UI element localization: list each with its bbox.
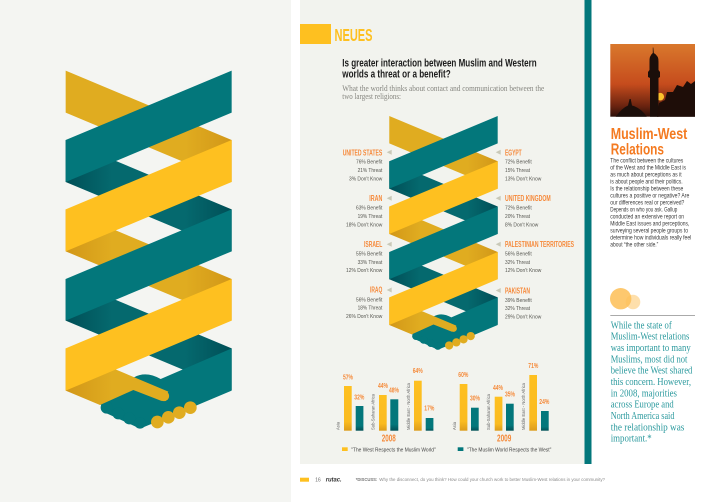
pull quote: the relationship was — [611, 422, 684, 433]
region labels 2008 — [336, 382, 411, 430]
legend: "The Muslim World Respects the West" — [467, 447, 551, 453]
sidebar body text: Is the relationship between these — [610, 186, 684, 193]
region labels 2009 — [452, 382, 526, 430]
data: Iran — [346, 194, 392, 228]
sidebar body text: surveying several people groups to — [610, 228, 688, 235]
footer: *DISCUSS: — [356, 477, 378, 483]
sidebar body text: is about people and their politics. — [610, 179, 683, 186]
panel: left cover page — [0, 0, 291, 502]
front yellow ribbon two — [66, 279, 232, 391]
data: Israel — [346, 240, 392, 274]
data: Egypt — [496, 148, 542, 182]
values 2008 — [343, 366, 435, 413]
data: Israel: 33% Threat — [358, 260, 383, 266]
pull quote — [611, 320, 692, 445]
region labels 2008: Asia — [336, 421, 340, 430]
sidebar body text: The conflict between the cultures — [610, 158, 683, 165]
pull quote: believe the West shared — [611, 366, 692, 377]
data: United States — [343, 148, 392, 182]
data: Palestinian Territories: PALESTINIAN TERRITORIES — [505, 240, 574, 249]
sidebar body text: about “the other side.” — [610, 242, 658, 249]
minaret silhouette — [648, 48, 660, 117]
data: Egypt: EGYPT — [505, 148, 522, 157]
icon: overlapping circles — [610, 288, 640, 309]
values 2009: 71% — [528, 361, 539, 370]
data: Palestinian Territories: 32% Threat — [505, 260, 530, 266]
data: United Kingdom: UNITED KINGDOM — [505, 194, 551, 203]
data: Israel: 12% Don't Know — [346, 268, 383, 274]
data: Israel: 55% Benefit — [356, 251, 383, 257]
teal hand — [101, 348, 232, 429]
data: Iran: 19% Threat — [358, 214, 383, 220]
data: Israel: ISRAEL — [364, 240, 382, 249]
legend — [342, 447, 551, 453]
back teal ribbon upper — [66, 140, 232, 251]
article subheading: two largest religions: — [342, 92, 401, 101]
yellow hand and thumb — [66, 348, 197, 428]
data: Egypt: 15% Threat — [505, 168, 530, 174]
sidebar body text: Middle East issues and perceptions, — [610, 221, 689, 228]
values 2009: 44% — [493, 383, 503, 392]
data: Pakistan: 32% Threat — [505, 306, 530, 312]
section tab — [300, 24, 331, 44]
panel: main article page — [300, 0, 584, 464]
tree silhouette — [657, 81, 695, 117]
pull quote: in 2008, majorities — [611, 388, 677, 399]
footer: Why the disconnect, do you think? How could your church work to better Muslim-West relations in your community? — [379, 477, 605, 483]
values 2008: 17% — [424, 404, 435, 413]
sidebar title: Muslim-West — [611, 126, 688, 143]
bar chart: 2009 — [452, 361, 550, 445]
data: United States: 76% Benefit — [356, 160, 383, 166]
article heading: worlds a threat or a benefit? — [342, 69, 451, 81]
values 2008: 44% — [378, 381, 388, 390]
values 2008: 48% — [389, 386, 399, 395]
legend: "The West Respects the Muslim World" — [351, 447, 436, 453]
year 2008: 2008 — [382, 434, 396, 445]
data: United Kingdom: 72% Benefit — [505, 206, 532, 212]
pull quote: While the state of — [611, 320, 672, 331]
values 2008: 57% — [343, 372, 353, 381]
sidebar body text: as much about perceptions as it — [610, 172, 682, 179]
data: Iraq: 56% Benefit — [356, 297, 383, 303]
data: Iraq: IRAQ — [370, 286, 382, 295]
data: Pakistan: PAKISTAN — [505, 286, 530, 295]
data: Pakistan — [496, 286, 542, 320]
bars 2009 — [460, 375, 549, 431]
sidebar body text: determine how individuals really feel — [610, 235, 691, 242]
values 2008: 32% — [354, 392, 365, 401]
pull quote: across Europe and — [611, 400, 674, 411]
sidebar body text: conducted an extensive report on — [610, 214, 684, 221]
pull quote: North America said — [611, 411, 674, 422]
footer: 16 — [315, 477, 321, 483]
data: United Kingdom: 8% Don't Know — [505, 222, 539, 228]
data: Egypt: 13% Don't Know — [505, 176, 542, 182]
data: Iran: 18% Don't Know — [346, 222, 383, 228]
values 2009: 24% — [539, 397, 550, 406]
chart: central ribbon handshake — [389, 116, 498, 350]
data: Iraq: 26% Don't Know — [346, 314, 383, 320]
data: United Kingdom — [496, 194, 551, 228]
pull quote: was important to many — [611, 343, 691, 354]
front teal ribbon one — [66, 71, 232, 182]
data: United States: 3% Don't Know — [349, 176, 383, 182]
sidebar title — [611, 126, 688, 158]
data: United Kingdom: 20% Threat — [505, 214, 530, 220]
footer — [300, 477, 605, 483]
bars 2008 — [344, 381, 433, 431]
pull quote: important.* — [611, 434, 652, 445]
panel: teal sidebar divider — [584, 0, 592, 464]
article subheading — [342, 84, 545, 101]
data: United States: 21% Threat — [358, 168, 383, 174]
values 2009: 60% — [458, 370, 469, 379]
back yellow ribbon middle — [66, 209, 232, 321]
pull quote rule — [610, 315, 695, 316]
sidebar body text: of the West and the Middle East is — [610, 165, 686, 172]
sidebar body text — [610, 158, 691, 249]
data: Pakistan: 39% Benefit — [505, 298, 532, 304]
pull quote: this concern. However, — [611, 377, 691, 388]
footer: rutac. — [326, 477, 342, 483]
data: Iran: IRAN — [369, 194, 382, 203]
region labels 2009: Asia — [452, 421, 457, 430]
region labels 2008: Middle East - North Africa — [406, 382, 411, 430]
data: Palestinian Territories: 56% Benefit — [505, 251, 532, 257]
year 2009: 2009 — [497, 434, 512, 445]
data: Palestinian Territories: 12% Don't Know — [505, 268, 542, 274]
article subheading: What the world thinks about contact and communication between the — [342, 84, 545, 93]
sidebar body text: Depends on who you ask. Gallup — [610, 207, 678, 214]
dome silhouette — [616, 99, 647, 117]
region labels 2009: Sub-Saharan Africa — [486, 393, 491, 430]
region labels 2009: Middle East - North Africa — [521, 382, 526, 430]
pull quote: Muslim-West relations — [611, 332, 689, 343]
values 2009: 30% — [470, 394, 480, 403]
front yellow ribbon one — [66, 140, 232, 251]
front teal ribbon two — [66, 209, 232, 321]
sidebar body text: our differences real or perceived? — [610, 200, 685, 207]
region labels 2008: Sub-Saharan Africa — [370, 393, 376, 430]
back yellow ribbon top — [66, 71, 232, 182]
sidebar body text: cultures a positive or negative? Are — [610, 193, 690, 200]
data: United States: UNITED STATES — [343, 148, 383, 157]
illustration: large ribbon handshake — [66, 71, 232, 429]
values 2009 — [458, 361, 550, 406]
data: Iran: 63% Benefit — [356, 206, 383, 212]
section title: NEUES — [334, 25, 372, 45]
values 2008: 64% — [413, 366, 423, 375]
pull quote: Muslims, most did not — [611, 354, 688, 365]
values 2009: 35% — [505, 389, 515, 398]
article heading: Is greater interaction between Muslim and Western — [342, 58, 537, 70]
bar chart: 2008 — [336, 366, 435, 445]
article heading — [342, 58, 537, 81]
sidebar title: Relations — [611, 141, 664, 158]
data: Iraq — [346, 286, 392, 320]
data: Pakistan: 29% Don't Know — [505, 314, 542, 320]
data: Egypt: 72% Benefit — [505, 160, 532, 166]
data: Palestinian Territories — [496, 240, 574, 274]
back teal ribbon lower — [66, 279, 232, 390]
data: Iraq: 18% Threat — [358, 306, 383, 312]
photo: minaret at sunset — [610, 44, 695, 117]
sun — [656, 93, 664, 100]
